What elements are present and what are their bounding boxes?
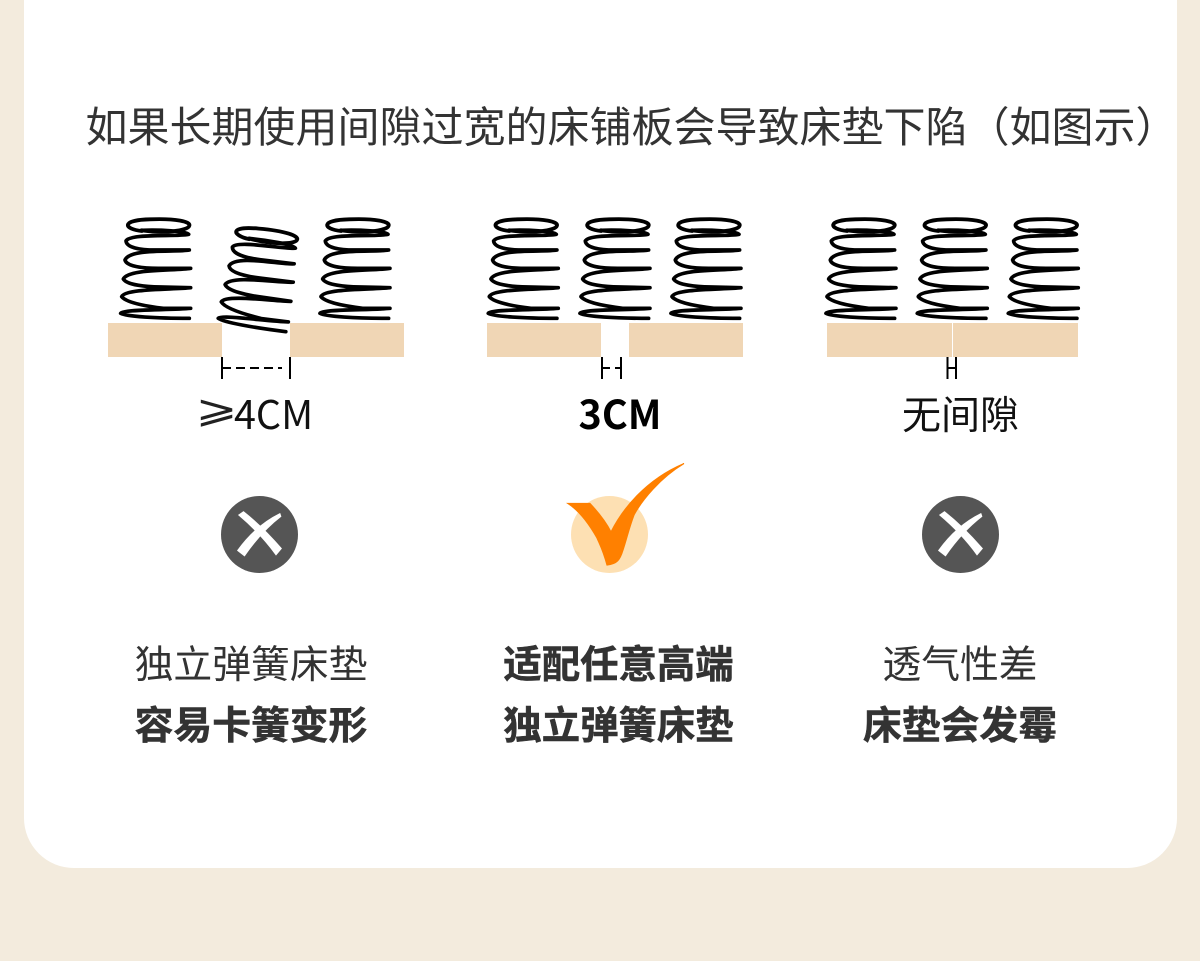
caption: no gap	[863, 634, 1057, 751]
icon: orange check	[568, 464, 684, 573]
boards: 4cm gap	[108, 323, 404, 357]
label: no gap: 无间隙	[902, 385, 1019, 441]
label: at least 4cm: 4CM	[234, 384, 313, 441]
caption: 4cm gap: 独立弹簧床垫	[135, 634, 367, 690]
springs: wide gap, middle one tipped	[121, 219, 390, 332]
icon: cross	[221, 496, 298, 573]
caption: 4cm gap: 容易卡簧变形	[135, 695, 367, 751]
boards: 3cm gap	[487, 323, 743, 357]
icon: cross	[922, 496, 999, 573]
label: 3cm: 3CM	[579, 384, 661, 441]
panel: no gap column	[826, 219, 1078, 751]
panel: 4cm gap column	[108, 219, 404, 751]
caption: 3cm gap: 独立弹簧床垫	[503, 695, 734, 751]
springs: upright	[488, 219, 741, 318]
title: 如果长期使用间隙过宽的床铺板会导致床垫下陷（如图示）	[86, 94, 1178, 155]
caption: 3cm gap	[503, 634, 734, 751]
label: at least 4cm: ⩾	[196, 377, 238, 433]
caption: no gap: 床垫会发霉	[863, 695, 1057, 751]
caption: 4cm gap	[135, 634, 367, 751]
dimension mark: 3cm	[602, 357, 621, 379]
caption: 3cm gap: 适配任意高端	[503, 634, 734, 690]
panel: 3cm gap column	[487, 219, 743, 751]
springs: upright	[826, 219, 1078, 318]
boards: no gap	[827, 323, 1078, 357]
caption: no gap: 透气性差	[882, 634, 1038, 690]
label: at least 4cm	[196, 377, 313, 441]
dimension mark: 4cm	[222, 357, 290, 379]
dimension mark: no gap	[948, 357, 956, 379]
